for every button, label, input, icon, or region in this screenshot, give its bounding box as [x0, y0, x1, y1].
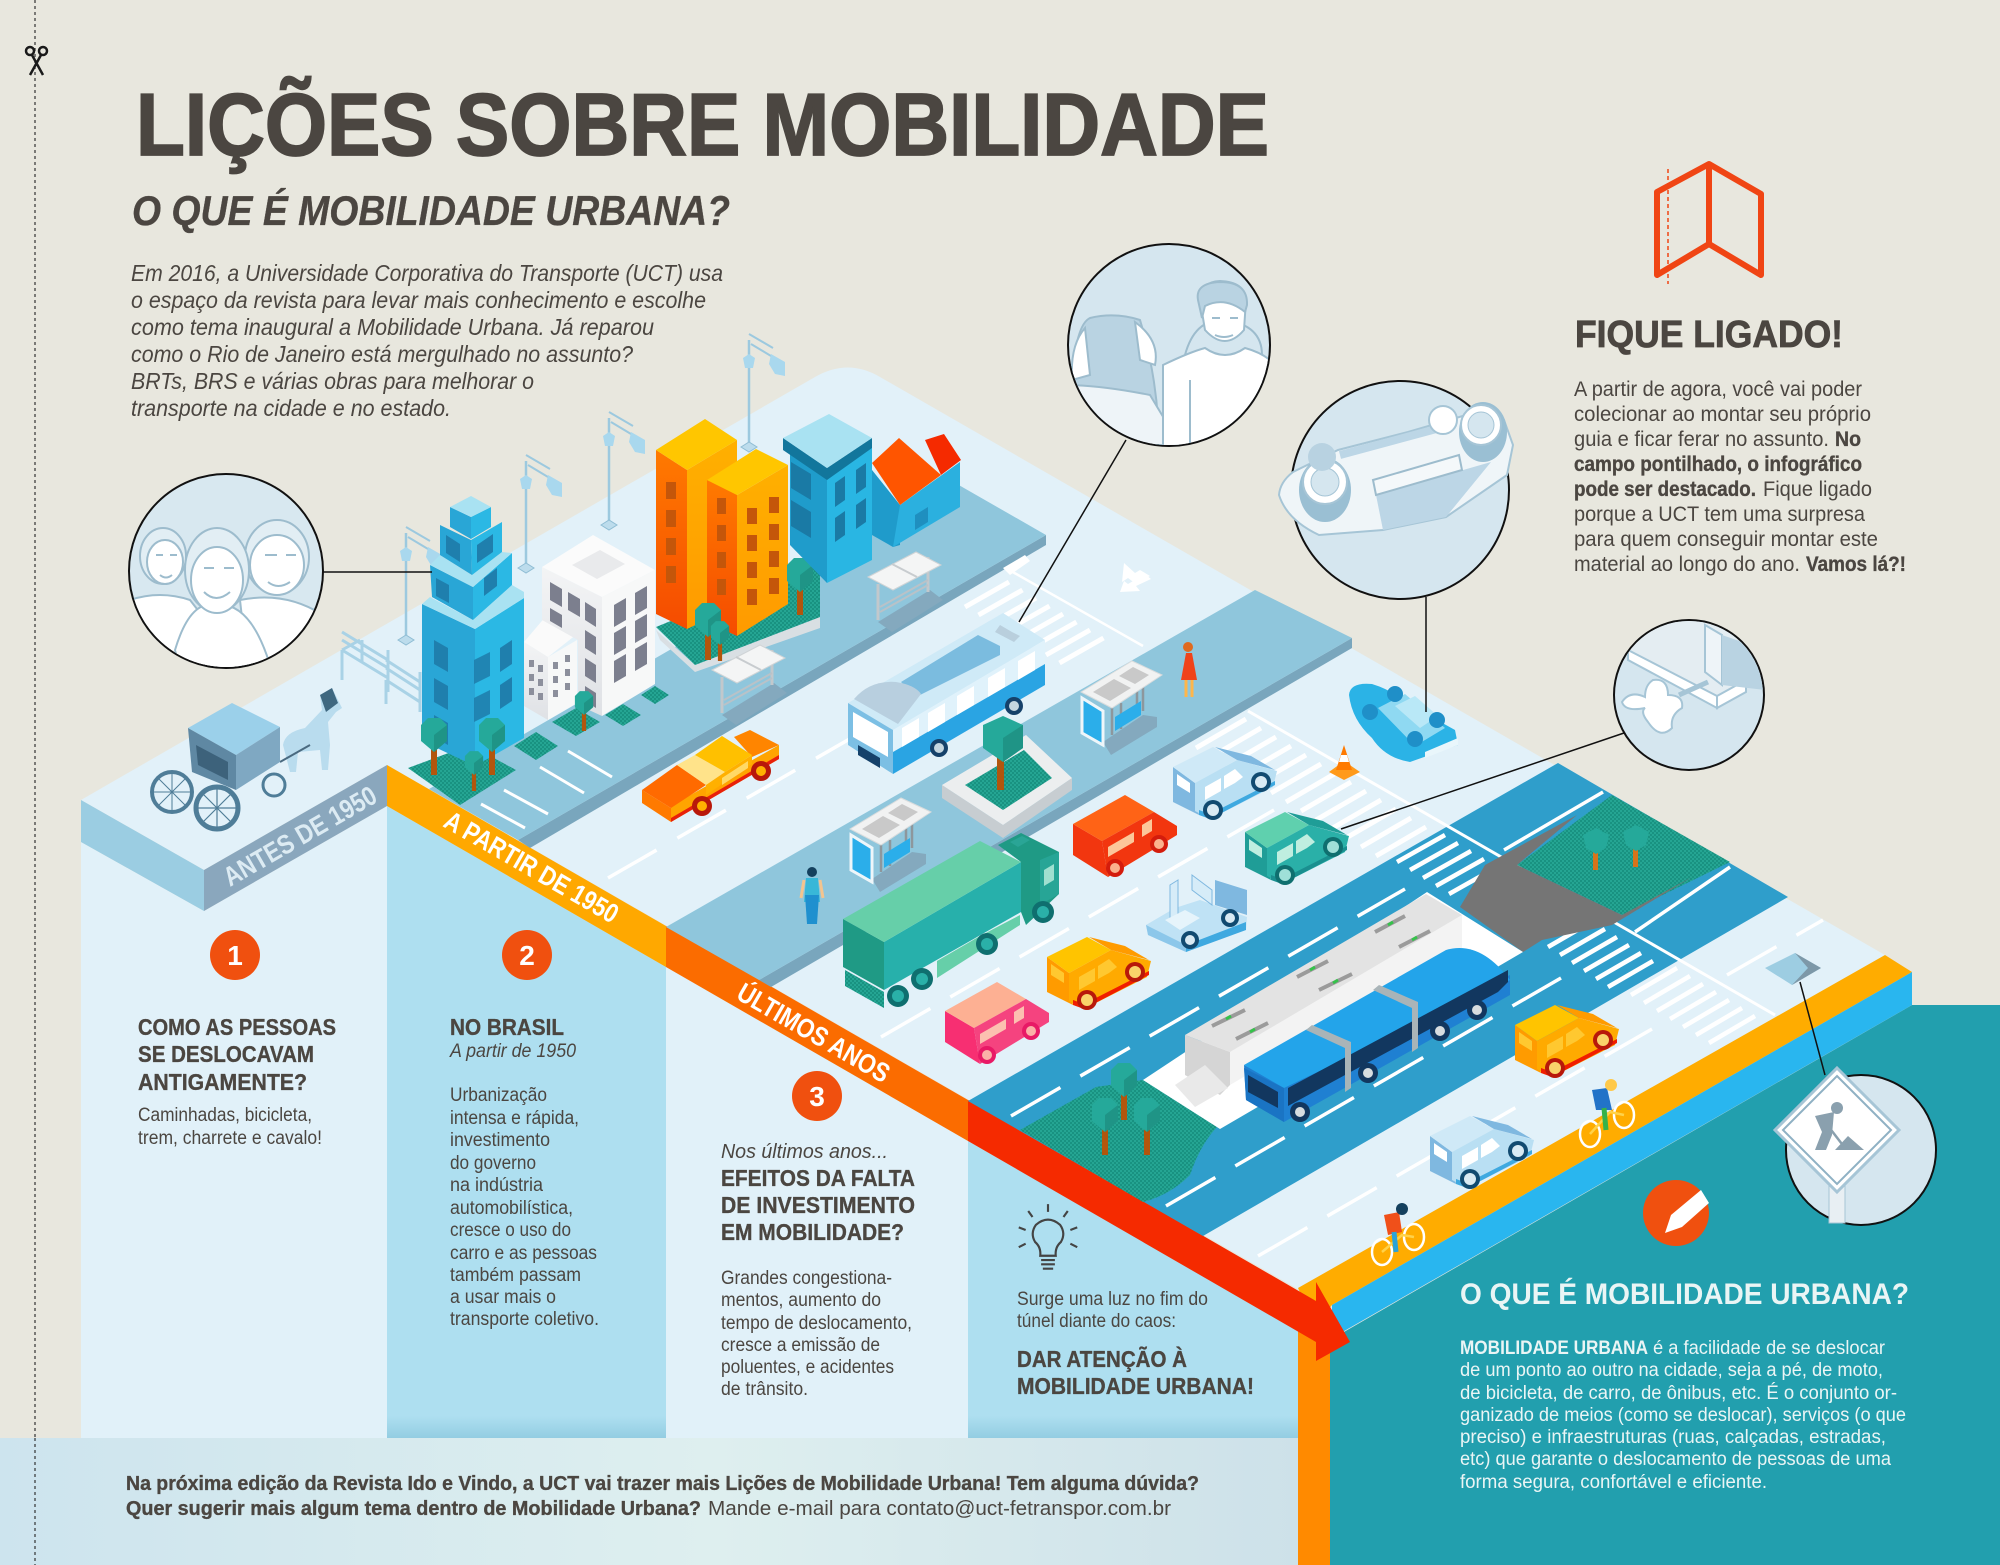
horse carriage: [152, 688, 342, 829]
text: fique ligado: pode ser destacado.: [1574, 478, 1756, 501]
lamp posts: [398, 334, 785, 645]
column 4 text: DAR ATENÇÃO À: [1017, 1345, 1187, 1372]
trees: lower left block: [1092, 1063, 1160, 1155]
trees at tower base: [421, 718, 505, 791]
intro text: o espaço da revista para levar mais conhecimento e escolhe: [131, 287, 706, 313]
isometric city surface: [81, 368, 1885, 1292]
connector: family: [323, 571, 432, 573]
teal panel text: forma segura, confortável e eficiente.: [1460, 1472, 1767, 1493]
text: fique ligado: A partir de agora, você vai poder: [1574, 378, 1862, 401]
icon: pencil badge: [1643, 1180, 1709, 1246]
connector: sign: [1800, 982, 1825, 1075]
house: [872, 434, 961, 547]
tunnel hole: [1460, 815, 1692, 952]
column 1 text: SE DESLOCAVAM: [138, 1041, 314, 1067]
text: fique ligado: campo pontilhado, o infográfico: [1574, 453, 1862, 476]
woman: [1181, 642, 1197, 697]
light van: [1173, 747, 1277, 820]
road: upper street: [429, 484, 1046, 848]
text: fique ligado: porque a UCT tem uma surpresa: [1574, 503, 1865, 526]
bottom band: Quer sugerir mais algum tema dentro de Mobilidade Urbana?: [126, 1498, 701, 1520]
column 1 text: trem, charrete e cavalo!: [138, 1128, 322, 1149]
teal panel text: de bicicleta, de carro, de ônibus, etc. É o conjunto or-: [1460, 1383, 1897, 1404]
truck: [843, 833, 1059, 1008]
column 3 text: EM MOBILIDADE?: [721, 1219, 904, 1245]
pink van: [945, 982, 1049, 1064]
text: fique ligado: colecionar ao montar seu próprio: [1574, 403, 1871, 426]
teal panel text: preciso) e infraestruturas (ruas, calçadas, estradas,: [1460, 1427, 1886, 1448]
articulated BRT bus: [1244, 948, 1510, 1122]
grass: lower left block: [1020, 1080, 1217, 1202]
flipped car: [1349, 684, 1458, 762]
column 3 text: Nos últimos anos...: [721, 1141, 888, 1163]
column 2 text: transporte coletivo.: [450, 1309, 599, 1330]
badge 2: 2: [519, 940, 535, 971]
text: fique ligado: Vamos lá?!: [1806, 553, 1906, 576]
badge 1: [210, 930, 260, 980]
column 3 text: poluentes, e acidentes: [721, 1357, 894, 1378]
column 2 text: também passam: [450, 1265, 581, 1286]
cone: [1329, 745, 1360, 780]
column 3 text: DE INVESTIMENTO: [721, 1192, 915, 1218]
open jeep: [1146, 875, 1247, 952]
tree planter: [942, 716, 1072, 838]
stop shelter A: [850, 798, 931, 892]
band: ultimos anos: ÚLTIMOS ANOS: [732, 976, 896, 1089]
band: a partir de 1950: [387, 765, 666, 967]
green car: [1245, 812, 1349, 885]
column 2 text: automobilística,: [450, 1198, 573, 1219]
column 4 text: [1017, 1289, 1254, 1399]
text: fique ligado: para quem conseguir montar este: [1574, 528, 1878, 551]
column 3: [666, 967, 968, 1438]
connector: bus to seats circle: [1019, 440, 1126, 622]
teal panel text: de um ponto ao outro na cidade, seja a pé, de moto,: [1460, 1360, 1883, 1381]
column 2 text: Urbanização: [450, 1085, 547, 1106]
circle: bus seats: [1060, 244, 1270, 450]
building: blue: [783, 414, 872, 583]
column 2 text: do governo: [450, 1153, 536, 1174]
manhole: [1765, 953, 1821, 985]
column 3 text: cresce a emissão de: [721, 1335, 880, 1356]
cyclist 2: [1372, 1203, 1424, 1265]
column 3 text: mentos, aumento do: [721, 1290, 881, 1311]
BRT station: [1143, 892, 1523, 1129]
column 3 text: [721, 1141, 915, 1400]
teal panel text: MOBILIDADE URBANA: [1460, 1338, 1648, 1359]
bottom band: [0, 1438, 1298, 1565]
column 4: [968, 1141, 1298, 1438]
circle: oil drip: [1614, 610, 1765, 770]
bottom band: Mande e-mail para contato@uct-fetranspor.com.br: [708, 1498, 1171, 1520]
circle: family: [128, 473, 324, 669]
band: antes de 1950: ANTES DE 1950: [218, 780, 382, 892]
column 2 text: A partir de 1950: [449, 1041, 576, 1062]
band: a partir de 1950: A PARTIR DE 1950: [439, 805, 624, 929]
text: fique ligado: No: [1835, 428, 1861, 451]
connector: oil drip: [1341, 733, 1624, 829]
icon: scissors: [26, 47, 47, 75]
teal panel text: ganizado de meios (como se deslocar), serviços (o que: [1460, 1405, 1906, 1426]
text: fique ligado: material ao longo do ano.: [1574, 553, 1800, 576]
man: [801, 867, 823, 924]
red van: [1073, 795, 1177, 877]
intro text: como tema inaugural a Mobilidade Urbana. Já reparou: [131, 314, 654, 340]
column 2 text: cresce o uso do: [450, 1220, 571, 1241]
building: blue tower: [422, 496, 524, 766]
column 4 text: túnel diante do caos:: [1017, 1311, 1176, 1332]
green patches: [408, 560, 820, 805]
building: tall orange 1: [656, 419, 737, 629]
road: middle strip: [666, 590, 1352, 987]
column 3 text: EFEITOS DA FALTA: [721, 1165, 915, 1191]
text: fique ligado: Fique ligado: [1763, 478, 1872, 501]
cyclist 1: [1580, 1079, 1634, 1147]
badge 2: [502, 930, 552, 980]
column 2 text: [449, 1014, 599, 1330]
intro text: transporte na cidade e no estado.: [131, 395, 451, 421]
column 4 text: MOBILIDADE URBANA!: [1017, 1373, 1254, 1399]
circle: road work sign: [1775, 1068, 1936, 1225]
light van right: [1430, 1116, 1534, 1189]
icon: light bulb: [1019, 1204, 1077, 1269]
intro text: BRTs, BRS e várias obras para melhorar o: [131, 368, 534, 394]
platform side left: [81, 800, 204, 911]
column 1 text: COMO AS PESSOAS: [138, 1014, 336, 1040]
badge 1: 1: [227, 940, 243, 971]
cut line: [34, 0, 36, 1565]
column 1 text: [138, 1014, 336, 1149]
column 3 text: de trânsito.: [721, 1379, 808, 1400]
column 2 text: carro e as pessoas: [450, 1243, 597, 1264]
text: fique ligado: guia e ficar ferar no assunto.: [1574, 428, 1829, 451]
yellow sedan: [642, 730, 779, 822]
building: small white: [524, 609, 577, 720]
bottom band: Na próxima edição da Revista Ido e Vindo, a UCT vai trazer mais Lições de Mobilidade Urbana! Tem alguma dúvida?: [126, 1473, 1199, 1495]
stop shelter B: [1081, 661, 1162, 755]
building: large white: [542, 535, 655, 716]
building: tall orange 2: [707, 449, 788, 636]
yellow edge band: [1298, 955, 1912, 1325]
badge 3: 3: [809, 1081, 825, 1112]
column 1 text: Caminhadas, bicicleta,: [138, 1105, 312, 1126]
grass: upper right block: [1517, 795, 1730, 915]
column 2 text: NO BRASIL: [450, 1014, 564, 1040]
column 2 text: investimento: [450, 1130, 550, 1151]
column 1 text: ANTIGAMENTE?: [138, 1069, 307, 1095]
title: LIÇÕES SOBRE MOBILIDADE: [136, 75, 1269, 174]
intro text: Em 2016, a Universidade Corporativa do Transporte (UCT) usa: [131, 260, 723, 286]
intro text: como o Rio de Janeiro está mergulhado no assunto?: [131, 341, 633, 367]
panel: teal corner: [1330, 1005, 2000, 1565]
subtitle: O QUE É MOBILIDADE URBANA?: [132, 187, 730, 235]
column 3 text: Grandes congestiona-: [721, 1268, 892, 1289]
teal panel text: [1460, 1277, 1909, 1493]
icon: folding map: [1657, 164, 1761, 284]
lane markings and crosswalks: [608, 571, 1823, 1256]
shelters on upper street: [712, 552, 943, 725]
teal panel text: é a facilidade de se deslocar: [1653, 1338, 1886, 1359]
teal panel text: O QUE É MOBILIDADE URBANA?: [1460, 1277, 1909, 1311]
light city bus: [848, 613, 1045, 774]
yellow van: [1047, 937, 1151, 1010]
band: ultimos anos: [666, 926, 968, 1141]
connector: flipped car: [1425, 597, 1427, 712]
trees at orange buildings: [695, 558, 813, 661]
column 2 text: na indústria: [450, 1175, 543, 1196]
circle: flipped car: [1279, 381, 1513, 599]
teal panel text: etc) que garante o deslocamento de pessoas de uma: [1460, 1449, 1891, 1470]
column 2 text: a usar mais o: [450, 1287, 556, 1308]
cross-street arrows: [1003, 555, 1151, 592]
column 1: [81, 806, 387, 1438]
red arrow: [968, 1100, 1350, 1361]
orange vertical bar: [1298, 1330, 1330, 1565]
road: BRT corridor: [968, 763, 1788, 1236]
column 3 text: tempo de deslocamento,: [721, 1313, 912, 1334]
trees: upper right block: [1583, 825, 1649, 870]
column 2: [387, 806, 666, 1438]
badge 3: [792, 1071, 842, 1121]
blue edge band: [1332, 972, 1912, 1338]
intro text: [131, 260, 723, 421]
small tree by white building: [575, 691, 593, 731]
yellow van right: [1515, 1005, 1619, 1078]
heading: fique ligado: FIQUE LIGADO!: [1575, 314, 1843, 356]
text: fique ligado: [1574, 378, 1906, 576]
column 2 text: intensa e rápida,: [450, 1108, 579, 1129]
column 4 text: Surge uma luz no fim do: [1017, 1289, 1208, 1310]
benches: [342, 632, 420, 712]
